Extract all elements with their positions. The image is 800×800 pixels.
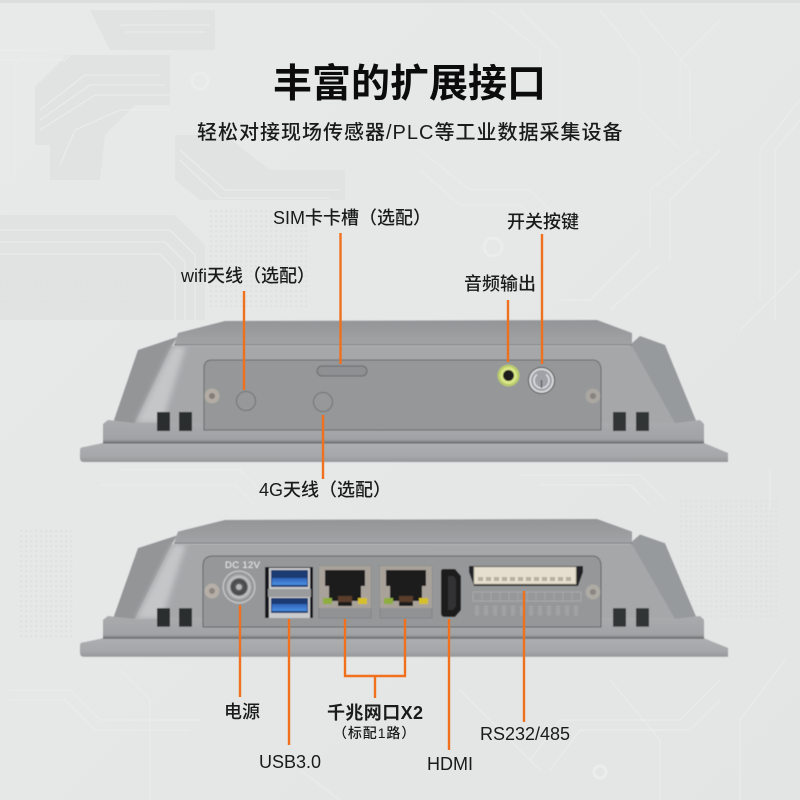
DC 12V silk label: DC 12V	[225, 560, 261, 571]
4G antenna hole	[314, 392, 332, 412]
label: power key: 开关按键	[507, 212, 579, 232]
screws	[204, 388, 600, 404]
terminal block	[469, 566, 583, 586]
wifi antenna hole	[236, 392, 256, 410]
terminal pin legend	[473, 592, 581, 616]
USB 3.0 ports	[265, 567, 313, 618]
label: RS232/485: RS232/485	[480, 724, 570, 744]
label: HDMI: HDMI	[427, 754, 473, 774]
leader: 4G	[322, 415, 324, 479]
label: power: 电源	[224, 702, 260, 722]
audio jack	[498, 364, 520, 386]
leader: SIM	[339, 233, 342, 364]
leader: gigabit bracket	[345, 619, 405, 698]
leader: wifi	[243, 291, 245, 390]
upper port panel	[204, 360, 601, 430]
RJ45 port 2	[380, 566, 432, 618]
leader: USB	[288, 619, 290, 745]
lower port panel	[203, 556, 601, 627]
label: SIM card slot: SIM卡卡槽（选配）	[273, 208, 431, 228]
label: wifi antenna: wifi天线（选配）	[180, 266, 315, 286]
HDMI port	[441, 569, 461, 617]
leader: RS232/485	[523, 591, 525, 722]
title: 丰富的扩展接口	[273, 63, 546, 106]
label: 4G antenna: 4G天线（选配）	[259, 480, 391, 500]
leader: audio	[507, 300, 509, 362]
label: gigabit ports	[327, 703, 423, 741]
label: audio output: 音频输出	[464, 274, 536, 294]
label: USB3.0: USB3.0	[259, 752, 321, 772]
DC jack	[222, 570, 256, 604]
device: upper side view	[80, 320, 728, 462]
SIM card slot	[317, 366, 367, 376]
screws	[204, 584, 600, 600]
RJ45 port 1	[319, 566, 371, 618]
leader: power key	[541, 234, 543, 364]
label: gigabit ports: （标配1路）	[333, 725, 416, 741]
label: gigabit ports: 千兆网口X2	[327, 703, 423, 723]
device: lower side view	[80, 519, 728, 657]
leader: DC power	[239, 605, 241, 697]
leader: HDMI	[448, 619, 450, 750]
power button	[528, 368, 554, 394]
subtitle: 轻松对接现场传感器/PLC等工业数据采集设备	[197, 121, 623, 144]
